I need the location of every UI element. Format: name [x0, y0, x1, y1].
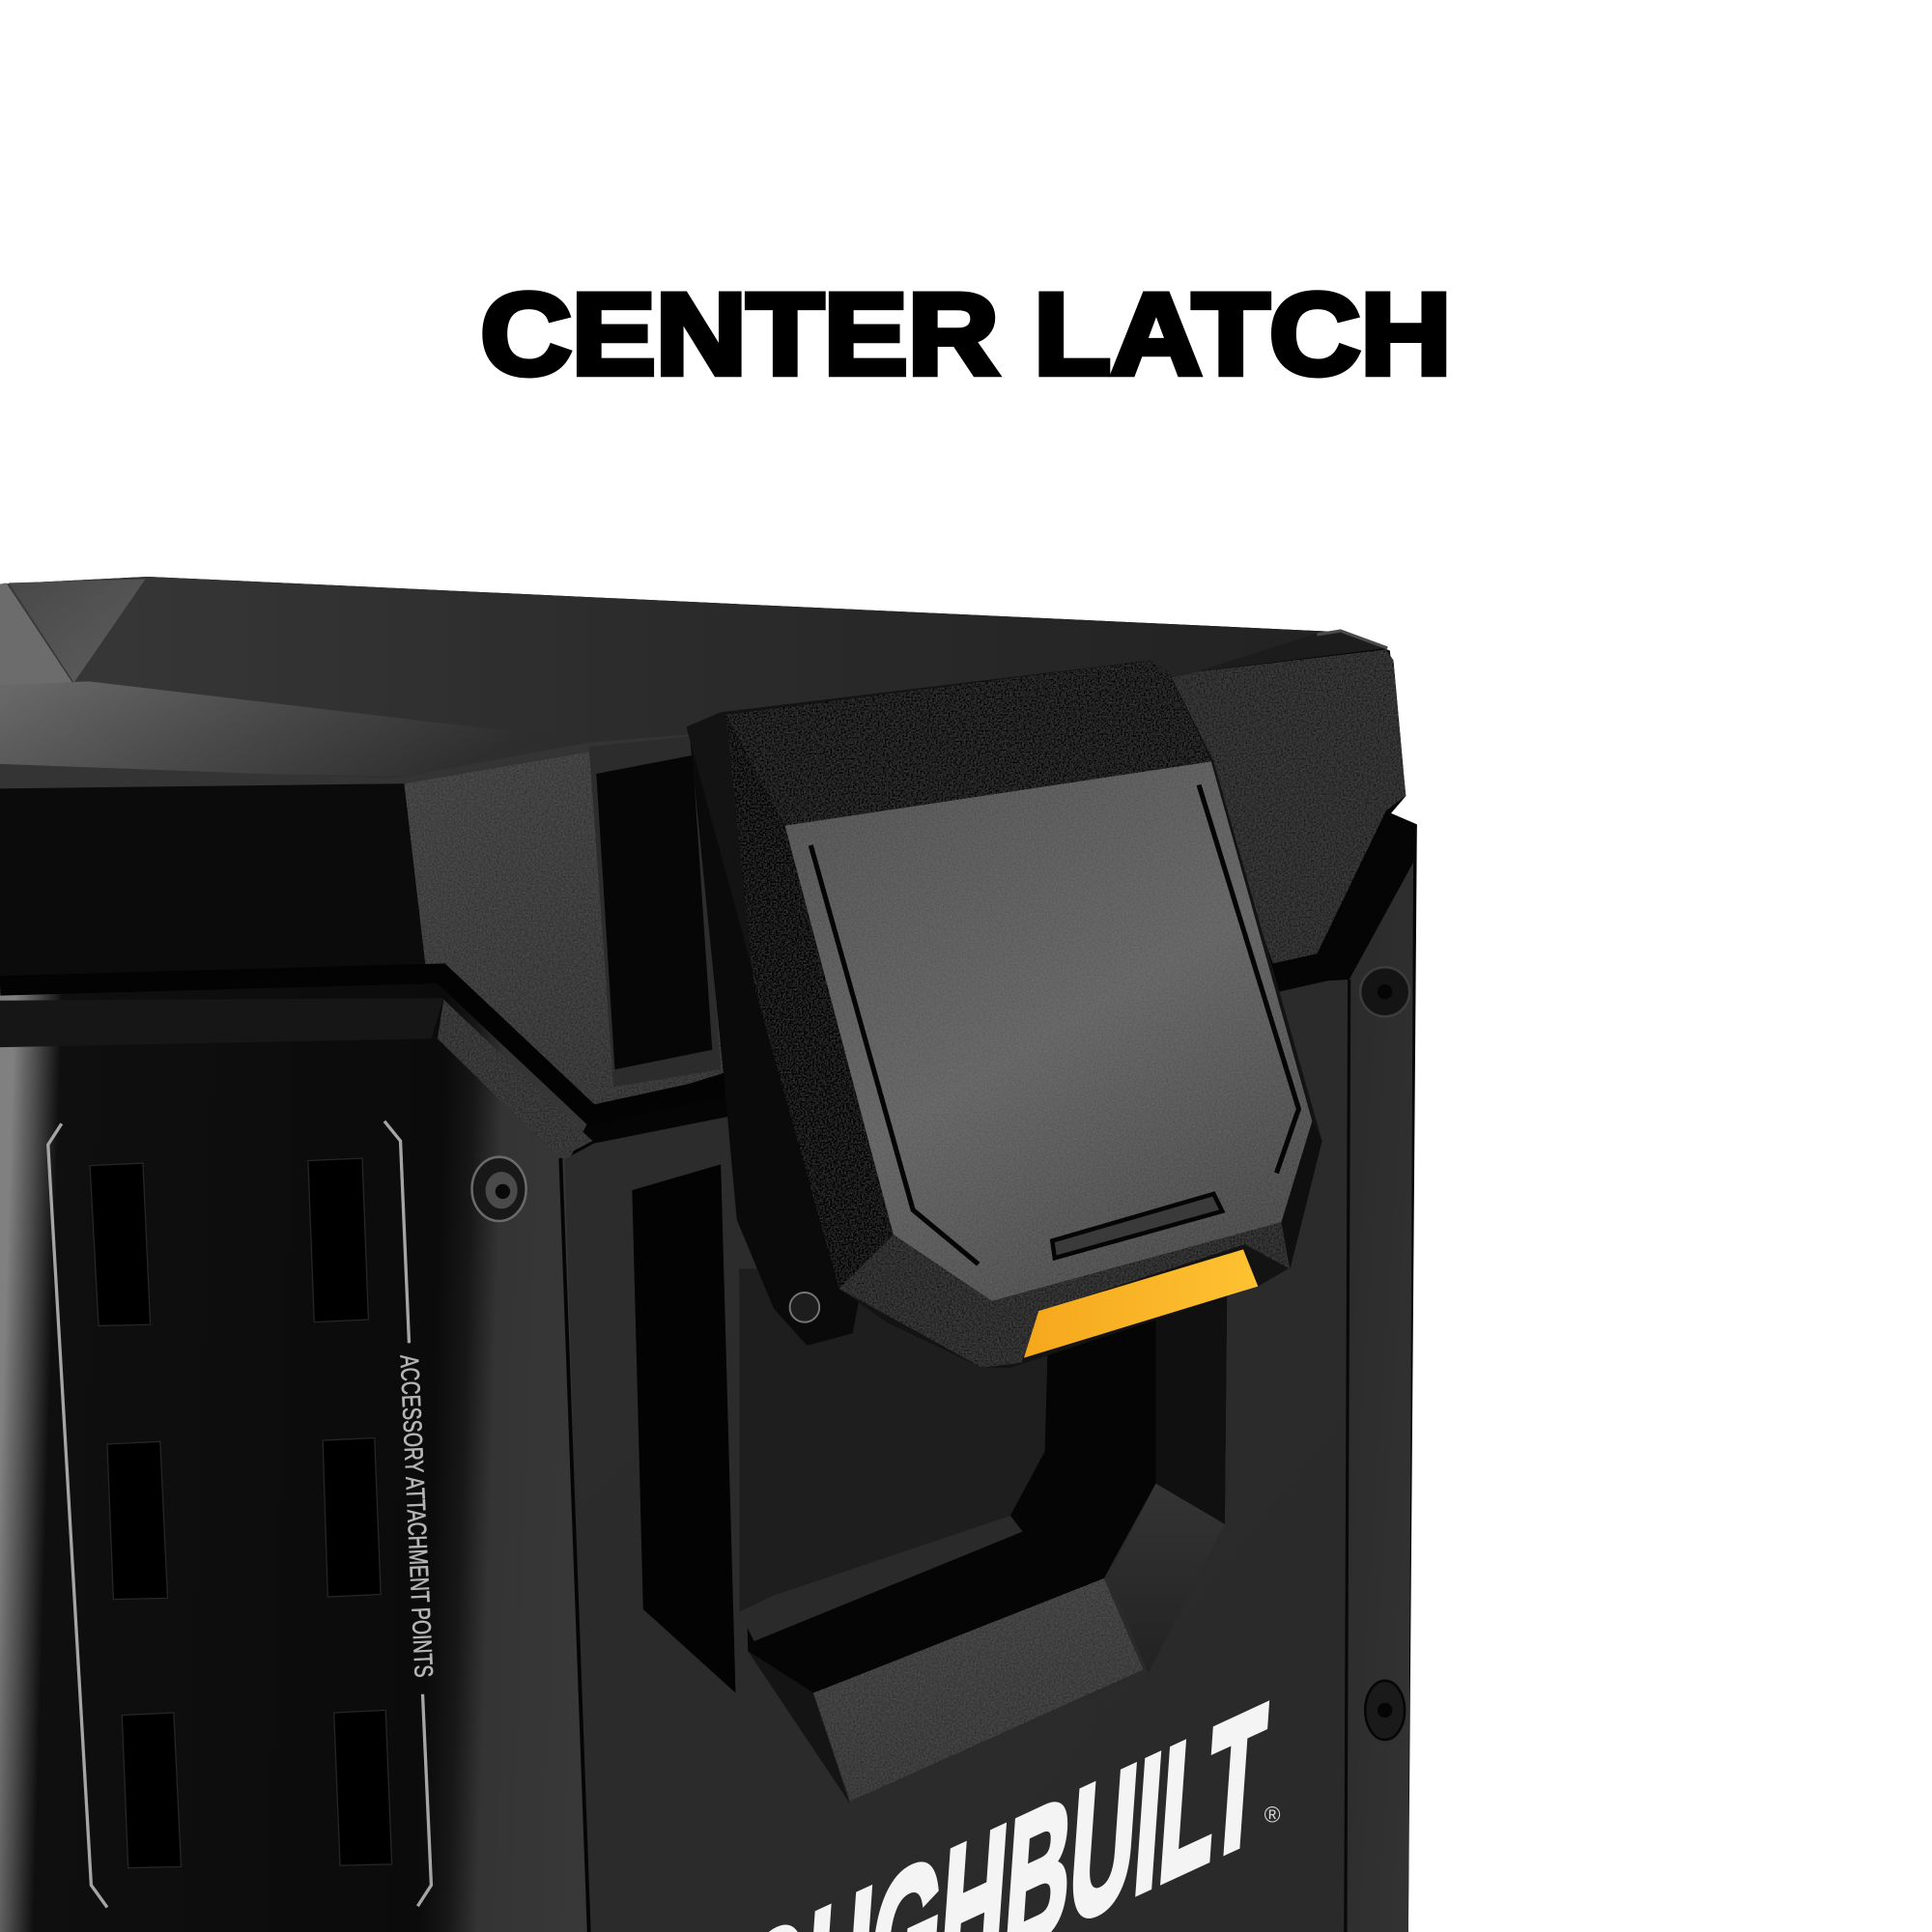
lower left panel with attachment slots [0, 974, 733, 1932]
center latch flap [686, 661, 1322, 1368]
product: toolbox with center latch [0, 577, 1417, 1932]
recess inner wall [739, 1269, 1050, 1611]
lid top rim [0, 734, 696, 799]
right lid rim [1189, 631, 1387, 674]
panel divider seam [560, 1158, 589, 1932]
recess ledge [739, 1516, 1023, 1641]
bracket left [48, 1123, 107, 1907]
flap left rim [725, 715, 894, 1289]
right divider seam [1346, 980, 1350, 1932]
handle bottom bevel [813, 1578, 1144, 1802]
hinge arm [690, 739, 863, 1346]
bracket right bottom [417, 1694, 431, 1906]
silhouette backing [0, 577, 1417, 1932]
recess right shaded strip [1155, 1269, 1227, 1524]
screw right lower [1365, 1681, 1405, 1740]
slot row 1 [90, 1158, 392, 1868]
lid corner side face [404, 739, 727, 1115]
tray floor [0, 681, 579, 777]
screw left [472, 1157, 526, 1221]
lid seam [0, 974, 733, 1115]
attachment label: ACCESSORY ATTACHMENT POINTS [395, 1354, 439, 1678]
chamfer band [438, 999, 593, 1158]
seam right of lid [1273, 815, 1417, 983]
flap body [686, 661, 1322, 1368]
brand logo [676, 1663, 1281, 1932]
screw right upper [1360, 967, 1409, 1016]
tray back wall [0, 577, 1343, 788]
registered mark: ® [1264, 1802, 1281, 1827]
handle recess [739, 1269, 1227, 1804]
lid notch slot [589, 735, 721, 1087]
flap top strip [725, 661, 1211, 826]
flap left slit [810, 845, 979, 1264]
flap bottom band [839, 1222, 1290, 1368]
right side column [1346, 863, 1413, 1932]
yellow release tab [1024, 1249, 1258, 1358]
flap right slit [1199, 784, 1298, 1173]
flap main face [784, 761, 1312, 1301]
right lid rim highlight [1318, 631, 1387, 648]
tray left facets [0, 579, 146, 685]
upper band [0, 998, 443, 1047]
center front panel [564, 976, 1350, 1932]
right lid corner [1172, 649, 1406, 963]
handle right bevel [1109, 1484, 1225, 1673]
lid front dark face [0, 783, 429, 992]
left handle slot [632, 1164, 735, 1693]
handle left bevel [748, 1651, 850, 1804]
bracket right top [384, 1122, 409, 1343]
flap right chamfer [1282, 1122, 1322, 1269]
flap grip slot [1052, 1194, 1222, 1258]
title: CENTER LATCH [480, 270, 1452, 399]
